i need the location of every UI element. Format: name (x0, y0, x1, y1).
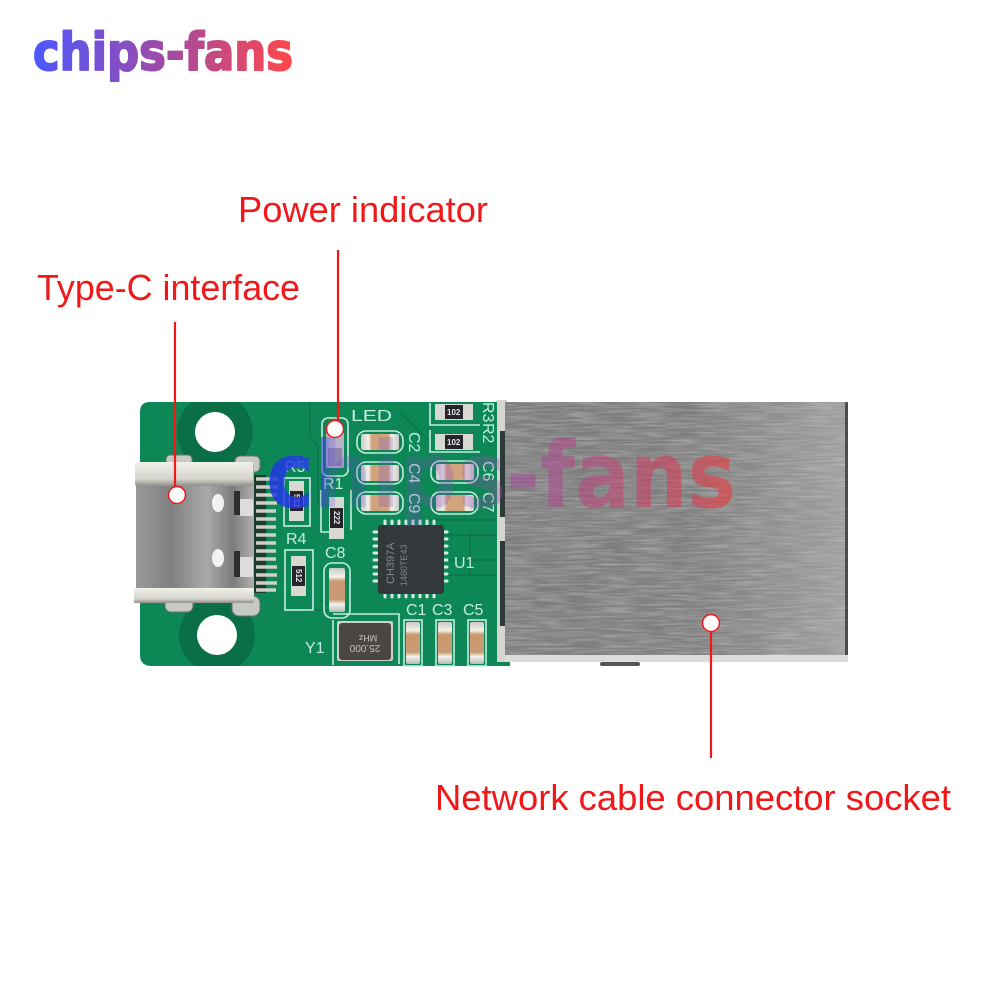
component: USB Type-C connector (134, 455, 278, 616)
silkscreen labels: R5 (285, 459, 306, 476)
arrow: Power indicator leader line (326, 250, 344, 438)
components: resistors: 512 (292, 494, 301, 508)
label: Power indicator: Power indicator (238, 189, 488, 230)
component: CH397A chip: 1480TE43 (399, 544, 409, 586)
silkscreen labels (285, 402, 496, 657)
arrow: Network socket leader line (702, 614, 720, 758)
panel: green circuit board (140, 394, 510, 673)
silkscreen labels: C8 (325, 545, 346, 562)
silkscreen labels: R3 (479, 402, 496, 423)
solder tabs (165, 455, 260, 616)
silkscreen labels: LED (351, 408, 392, 425)
silkscreen labels: C5 (463, 602, 484, 619)
components: resistors: 512 (294, 569, 303, 583)
silkscreen labels: C1 (406, 602, 427, 619)
silkscreen labels: U1 (454, 555, 475, 572)
silkscreen labels: C4 (405, 463, 422, 484)
silkscreen labels: C9 (405, 493, 422, 514)
component: LED (326, 432, 344, 468)
mounting holes (195, 412, 237, 655)
product: PCB module (134, 394, 848, 673)
component: CH397A chip: CH397A (385, 542, 397, 584)
components: resistors: 222 (332, 511, 341, 525)
logo: chips-fans: chips-fans (33, 23, 293, 83)
component: RJ45 metal shield (497, 400, 848, 666)
silkscreen labels: R4 (286, 531, 307, 548)
pins (254, 475, 266, 593)
silkscreen labels: C3 (432, 602, 453, 619)
label: Type-C interface: Type-C interface (37, 267, 300, 308)
components: resistors: 102 (447, 438, 461, 447)
silkscreen labels: C6 (479, 461, 496, 482)
silkscreen outlines (284, 403, 486, 666)
watermark: chips-fans: chips-fans (266, 422, 736, 529)
label: Network cable connector socket: Network cable connector socket (435, 777, 951, 818)
components: capacitors (329, 434, 484, 664)
component: crystal: MHz (358, 633, 377, 643)
arrow: Type-C leader line (168, 322, 186, 504)
component: CH397A chip (374, 521, 447, 597)
components: resistors (289, 404, 473, 596)
silkscreen labels: R2 (479, 423, 496, 444)
silkscreen labels: Y1 (305, 640, 325, 657)
silkscreen labels: C7 (479, 492, 496, 513)
component: crystal: 25.000 (349, 642, 380, 653)
silkscreen labels: C2 (405, 432, 422, 453)
silkscreen labels: R1 (323, 476, 344, 493)
components: resistors: 102 (447, 408, 461, 417)
component: crystal (337, 621, 393, 661)
